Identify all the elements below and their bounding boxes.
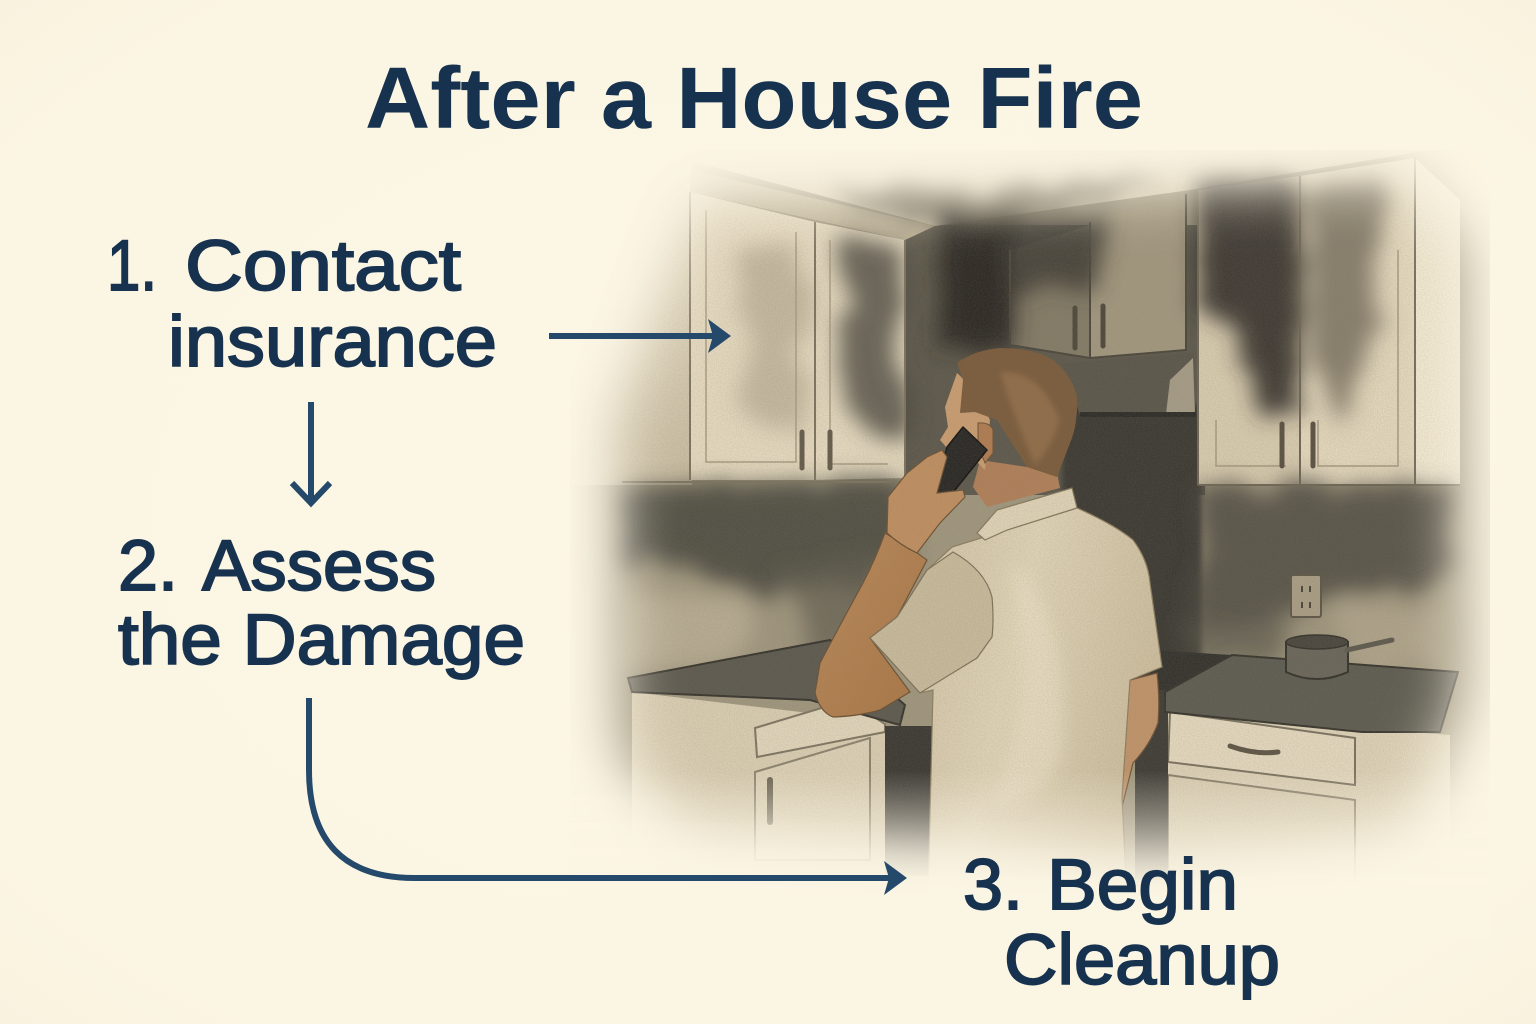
illustration: man on phone in smoke-damaged kitchen — [570, 150, 1490, 939]
bottom fade — [570, 770, 1490, 900]
range hood — [1077, 358, 1196, 417]
step 2: assess the damage: the Damage — [118, 601, 525, 680]
step 3: begin cleanup: 3. — [963, 846, 1023, 925]
man: raised arm — [815, 533, 927, 717]
title: After a House Fire — [365, 50, 1143, 147]
step 2: assess the damage — [118, 527, 525, 680]
step 1: contact insurance: 1. — [107, 227, 157, 306]
arrow: step 1 to cabinets — [549, 319, 731, 353]
stove top — [1151, 652, 1230, 690]
step 2: assess the damage: 2. — [118, 527, 178, 606]
left lower cabinets — [632, 693, 932, 868]
step 3: begin cleanup: Begin — [1047, 846, 1238, 925]
man: shirt shading — [1002, 592, 1063, 796]
step 1: contact insurance: insurance — [168, 303, 497, 382]
man: collar — [977, 488, 1077, 540]
man: phone — [938, 426, 988, 492]
step 3: begin cleanup — [963, 846, 1280, 1000]
right countertop — [1165, 655, 1458, 732]
upper left cabinets — [690, 192, 905, 480]
kitchen wall and backsplash — [570, 150, 1490, 920]
cabinet line work — [622, 158, 1460, 485]
smoke stains — [620, 170, 1455, 675]
man: shirt torso — [920, 508, 1163, 875]
wall outlet — [1291, 575, 1321, 617]
paper grain — [620, 184, 1460, 834]
upper right cabinets — [1198, 158, 1460, 486]
man: neck — [973, 460, 1060, 507]
upper centre cabinets — [1010, 225, 1090, 358]
step 2: assess the damage: Assess — [202, 527, 436, 606]
man: sleeve — [870, 552, 993, 693]
step 1: contact insurance: Contact — [185, 227, 461, 306]
right lower cabinets — [1135, 690, 1450, 876]
saucepan — [1286, 635, 1392, 679]
man: far arm — [1120, 673, 1159, 807]
man: hair — [957, 348, 1077, 477]
step 3: begin cleanup: Cleanup — [1004, 921, 1280, 1000]
left countertop — [628, 640, 905, 725]
smoke-stained ceiling — [709, 151, 1394, 240]
arrow: step 1 to step 2 — [292, 402, 330, 503]
man: ear — [978, 423, 993, 463]
man: hand — [887, 450, 965, 553]
step 1: contact insurance — [107, 227, 497, 382]
arrow: step 2 to step 3 — [309, 698, 907, 895]
man: face — [940, 373, 990, 470]
man — [815, 348, 1162, 900]
